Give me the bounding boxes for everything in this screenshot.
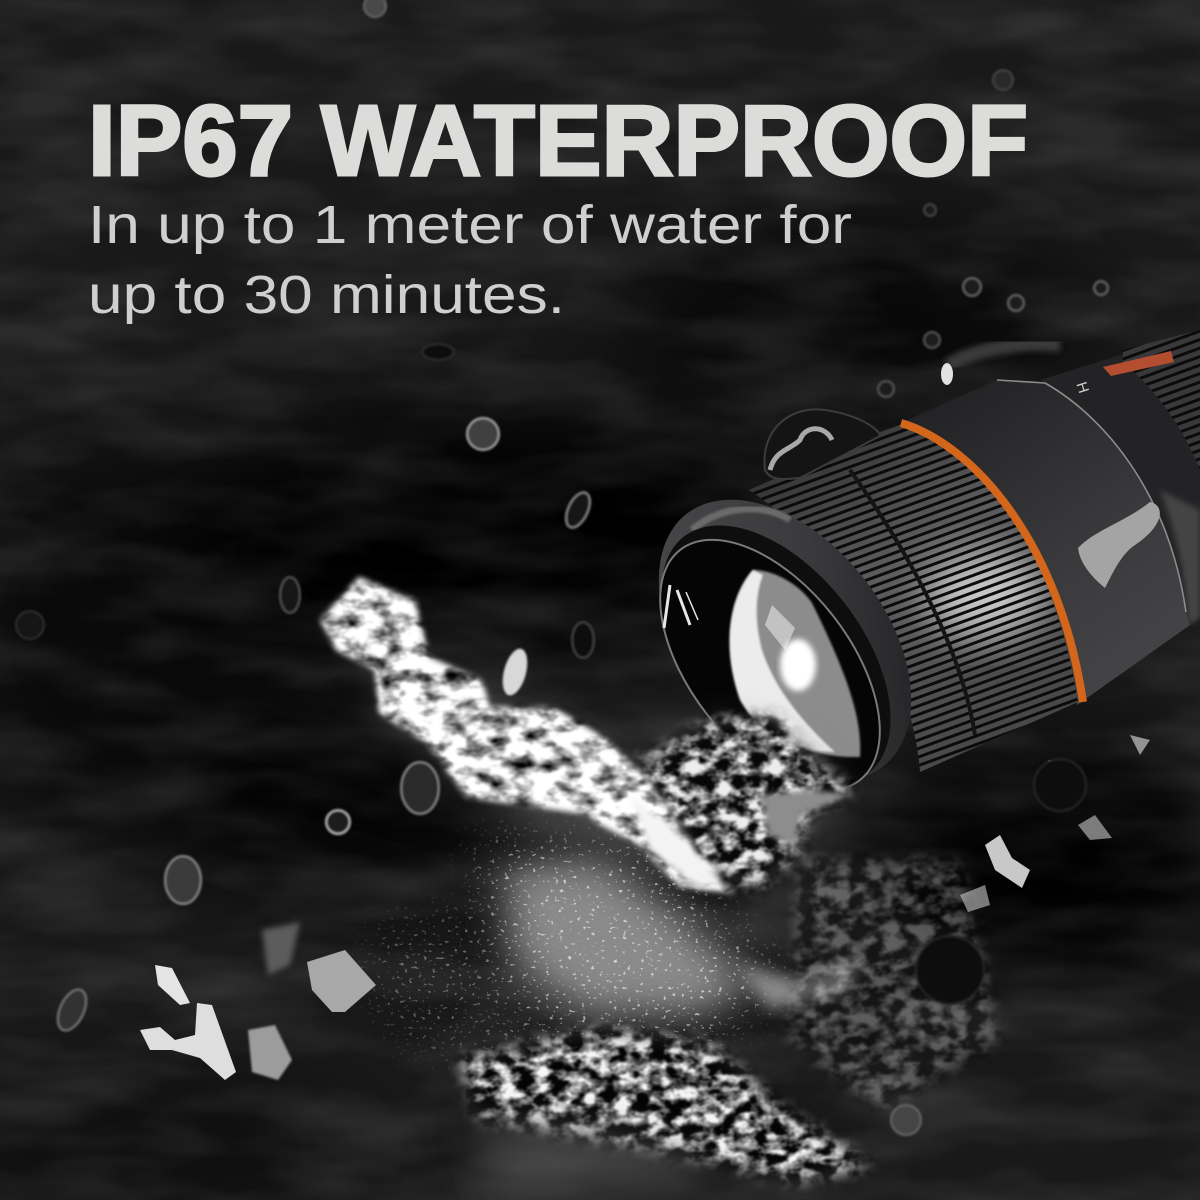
textured water to the right of the pool (790, 860, 1000, 1110)
LED highlight (780, 639, 816, 691)
wet patch on body (1078, 502, 1160, 588)
inner dark ring (616, 484, 936, 826)
subtitle line 1: In up to 1 meter of water for (88, 195, 852, 255)
orange mode band (1103, 351, 1174, 376)
subtitle line 2: up to 30 minutes. (88, 265, 565, 325)
wet ridge on bezel (692, 509, 790, 530)
title: IP67 WATERPROOF (88, 85, 1028, 197)
mid body section (901, 380, 1190, 705)
stream foil texture (320, 577, 735, 893)
textured water to the left of the pool (370, 900, 510, 1060)
right splash patches (960, 735, 1150, 912)
silver seam (997, 380, 1186, 612)
lens body (730, 570, 860, 757)
ribbed grip (749, 424, 1078, 772)
flashlight tail section (1040, 330, 1200, 628)
glassy wave (762, 790, 850, 845)
stream bright tail (630, 795, 725, 888)
left splash patches (140, 922, 376, 1080)
lens opening (617, 501, 923, 829)
flashlight (658, 330, 1200, 788)
tail collar (1160, 490, 1200, 625)
highlight droplet by the tail (941, 344, 1060, 385)
splash glow (340, 590, 830, 860)
water splash (140, 577, 1150, 1195)
lens white band (730, 570, 835, 752)
orange ring (901, 423, 1083, 702)
tail ribs (1123, 330, 1200, 470)
splash right mass (640, 717, 854, 890)
bottom splash (460, 1030, 870, 1195)
puddle on the water near the bezel (764, 409, 880, 479)
main splash stream (320, 577, 735, 893)
front bezel (608, 452, 962, 828)
lens streaks (664, 585, 698, 628)
mode letter H: H (1072, 380, 1092, 395)
grip highlight (925, 551, 1045, 639)
lens facet (765, 605, 795, 650)
lower pool reflection (470, 840, 860, 1050)
